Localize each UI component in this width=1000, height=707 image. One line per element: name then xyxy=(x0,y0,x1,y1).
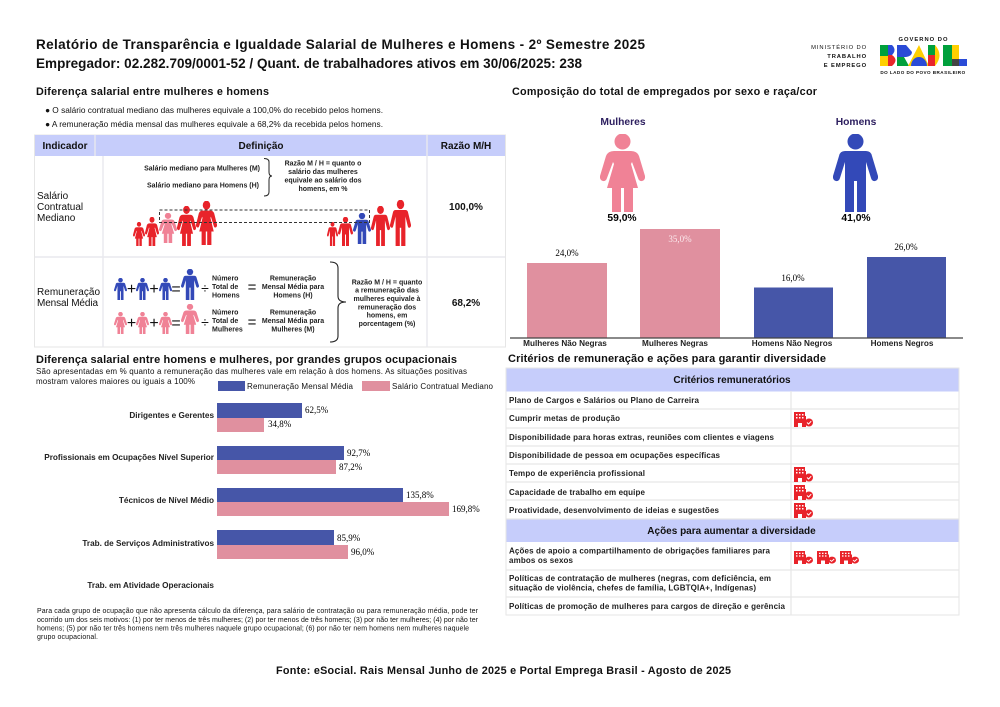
group: atividade operacional: Trab. em Atividade Operacionais xyxy=(87,581,214,590)
actions list xyxy=(509,546,786,611)
group: profissionais: Profissionais em Ocupações Nível Superior xyxy=(44,453,215,462)
panel: mulheres pictogram: 59,0% xyxy=(607,213,637,224)
razão m/h explanation: homens, em % xyxy=(298,186,348,193)
chart description: São apresentadas em % quanto a remuneração das mulheres vale em relação à dos homens. As situações positivas xyxy=(36,367,467,376)
row label: salário contratual mediano: Salário xyxy=(37,191,69,202)
razão m/h explanation: salário das mulheres xyxy=(288,169,358,176)
fórmula mulheres: Mulheres xyxy=(212,326,243,334)
criteria list: Capacidade de trabalho em equipe xyxy=(509,488,646,497)
razão m/h explanation 2: Razão M / H = quanto xyxy=(352,280,422,286)
table header xyxy=(42,141,491,152)
fórmula homens: Remuneração xyxy=(270,276,316,282)
bar: mulheres não negras xyxy=(523,248,607,348)
definição salário mediano text: Salário mediano para Mulheres (M) xyxy=(144,166,260,172)
razão m/h explanation: Razão M / H = quanto o xyxy=(285,160,361,168)
group: técnicos: Técnicos de Nível Médio xyxy=(119,496,214,505)
bullet text block: ● O salário contratual mediano das mulheres equivale a 100,0% do recebido pelos homens. xyxy=(45,105,383,115)
legend xyxy=(218,381,494,391)
panel: mulheres pictogram: Mulheres xyxy=(600,117,646,128)
razão m/h explanation 2: remuneração dos xyxy=(358,304,416,311)
group: serviços administrativos: 96,0% xyxy=(351,547,375,557)
criteria list: Proatividade, desenvolvimento de ideias e sugestões xyxy=(509,506,720,515)
razão m/h explanation 2: mulheres equivale à xyxy=(354,296,421,303)
fórmula homens: + xyxy=(149,281,159,298)
fórmula homens: ÷ xyxy=(201,280,209,296)
fórmula mulheres: ÷ xyxy=(201,314,209,330)
icon group: homens ordenados xyxy=(327,200,411,246)
group: serviços administrativos: Trab. de Serviços Administrativos xyxy=(82,539,214,548)
definição salário mediano text: Salário mediano para Homens (H) xyxy=(147,182,259,190)
fórmula homens: Homens (H) xyxy=(273,292,313,300)
criteria list: Tempo de experiência profissional xyxy=(509,469,645,478)
icons: critérios adotados xyxy=(794,412,813,518)
logo: governo do brasil: DO LADO DO POVO BRASILEIRO xyxy=(880,70,966,75)
fórmula mulheres: Mulheres (M) xyxy=(271,326,315,334)
bar: mulheres negras xyxy=(640,229,720,348)
title xyxy=(36,37,645,71)
razão m/h explanation 2: homens, em xyxy=(367,313,407,320)
footnote: ocorrido um dos seis motivos: (1) por ter menos de três mulheres; (2) por ter menos de três homens; (3) por não ter mulheres; (4) por não ter xyxy=(37,617,479,624)
footnote xyxy=(37,608,479,641)
criteria list: Disponibilidade para horas extras, reuniões com clientes e viagens xyxy=(509,433,775,442)
razão m/h explanation: equivale ao salário dos xyxy=(284,178,362,184)
table header: Razão M/H xyxy=(441,141,491,152)
chart description xyxy=(36,367,467,386)
heading: diferença por grupos ocupacionais: Diferença salarial entre homens e mulheres, por grandes grupos ocupacionais xyxy=(36,354,457,366)
panel: homens pictogram xyxy=(833,117,878,224)
row label: remuneração mensal média: Mensal Média xyxy=(37,298,98,309)
fórmula homens: Total de xyxy=(212,284,238,291)
panel: homens pictogram: Homens xyxy=(836,117,877,128)
fórmula mulheres: + xyxy=(149,315,159,332)
heading: critérios de remuneração: Critérios de remuneração e ações para garantir diversidade xyxy=(508,353,826,365)
value: 100,0%: 100,0% xyxy=(449,202,483,213)
table header: Definição xyxy=(238,141,284,152)
actions list: ambos os sexos xyxy=(509,556,574,565)
heading: composição: Composição do total de empregados por sexo e raça/cor xyxy=(512,86,818,98)
razão m/h explanation 2 xyxy=(352,280,422,328)
fórmula homens: = xyxy=(248,279,257,296)
fórmula mulheres: Número xyxy=(212,310,238,316)
group: técnicos: 169,8% xyxy=(452,504,480,514)
fórmula mulheres: Total de xyxy=(212,318,238,325)
razão m/h explanation 2: porcentagem (%) xyxy=(359,321,415,328)
fórmula mulheres: + xyxy=(127,315,136,332)
fórmula mulheres: = xyxy=(248,314,257,331)
group: serviços administrativos xyxy=(82,530,375,559)
header: ações para aumentar a diversidade: Ações para aumentar a diversidade xyxy=(647,526,816,537)
fórmula homens: Mensal Média para xyxy=(262,284,324,291)
fórmula homens: + xyxy=(127,281,136,298)
heading: diferença salarial entre mulheres e homens: Diferença salarial entre mulheres e homens xyxy=(36,86,269,98)
row label: remuneração mensal média xyxy=(37,287,100,309)
source: Fonte: eSocial. Rais Mensal Junho de 2025 e Portal Emprega Brasil - Agosto de 2025 xyxy=(276,665,731,677)
razão m/h explanation xyxy=(284,160,362,193)
footnote: homens; (5) por não ter três homens nem três mulheres naquele grupo ocupacional; (6) por não ter nem homens nem mulheres naquele xyxy=(37,626,469,632)
fórmula homens: Homens xyxy=(212,292,240,300)
fórmula mulheres xyxy=(114,304,324,334)
criteria list: Plano de Cargos e Salários ou Plano de Carreira xyxy=(509,396,700,405)
logo: ministério do trabalho e emprego: E EMPREGO xyxy=(824,63,867,69)
group: técnicos xyxy=(119,488,480,516)
logo: governo do brasil xyxy=(880,37,967,75)
title: Empregador: 02.282.709/0001-52 / Quant. de trabalhadores ativos em 30/06/2025: 238 xyxy=(36,56,582,71)
chart description: mostram valores maiores ou iguais a 100% xyxy=(36,377,195,386)
bar: homens não negros: 16,0% xyxy=(781,273,805,283)
razão m/h explanation 2: a remuneração das xyxy=(355,288,419,295)
legend: Remuneração Mensal Média xyxy=(247,382,354,391)
criteria list xyxy=(509,396,775,515)
actions list: Políticas de promoção de mulheres para cargos de direção e gerência xyxy=(509,602,786,611)
group: dirigentes e gerentes xyxy=(129,403,329,432)
bar: homens negros xyxy=(867,242,946,348)
bar chart: composição por sexo e raça xyxy=(510,229,963,348)
definição salário mediano text xyxy=(144,166,260,190)
fórmula mulheres: = xyxy=(171,315,181,332)
bar: homens não negros xyxy=(752,273,833,348)
panel: homens pictogram: 41,0% xyxy=(841,213,871,224)
group: profissionais xyxy=(44,446,371,474)
fórmula mulheres: Mensal Média para xyxy=(262,318,324,325)
large brace xyxy=(330,262,346,342)
group: profissionais: 92,7% xyxy=(347,448,371,458)
criteria list: Disponibilidade de pessoa em ocupações específicas xyxy=(509,451,721,460)
footnote: Para cada grupo de ocupação que não apresenta cálculo da diferença, para salário de contratação ou para remuneração média, pode ter xyxy=(37,608,479,615)
footnote: grupo ocupacional. xyxy=(37,634,98,641)
title: Relatório de Transparência e Igualdade Salarial de Mulheres e Homens - 2º Semestre 2025 xyxy=(36,37,645,52)
bar: homens não negros: Homens Não Negros xyxy=(752,339,833,348)
bar: homens negros: Homens Negros xyxy=(871,339,934,348)
fórmula mulheres: Remuneração xyxy=(270,310,316,316)
dashed median box xyxy=(160,210,370,222)
group: serviços administrativos: 85,9% xyxy=(337,533,361,543)
row label: salário contratual mediano xyxy=(37,191,83,224)
bar: mulheres negras: 35,0% xyxy=(668,234,692,244)
icons: ações adotadas xyxy=(794,551,859,564)
legend: Salário Contratual Mediano xyxy=(392,382,494,391)
row label: salário contratual mediano: Contratual xyxy=(37,202,83,213)
actions list: Políticas de contratação de mulheres (negras, com deficiência, em xyxy=(509,574,771,583)
bar: mulheres negras: Mulheres Negras xyxy=(642,339,708,348)
bar: homens negros: 26,0% xyxy=(894,242,918,252)
bullet text block: ● A remuneração média mensal das mulheres equivale a 68,2% da recebida pelos homens. xyxy=(45,119,383,129)
group: profissionais: 87,2% xyxy=(339,462,363,472)
actions list: situação de violência, chefes de família, LGBTQIA+, Indígenas) xyxy=(509,584,756,592)
actions list: Ações de apoio a compartilhamento de obrigações familiares para xyxy=(509,546,771,556)
fórmula homens xyxy=(114,269,324,300)
bullet text block xyxy=(45,105,383,129)
fórmula homens: = xyxy=(171,281,181,298)
panel: critérios e ações table xyxy=(506,368,959,615)
bar: mulheres não negras: Mulheres Não Negras xyxy=(523,339,607,348)
table header: Indicador xyxy=(42,141,88,152)
group: dirigentes e gerentes: 62,5% xyxy=(305,405,329,415)
panel: tabela de indicadores xyxy=(34,135,506,347)
logo: ministério do trabalho e emprego: TRABALHO xyxy=(827,54,867,60)
group: técnicos: 135,8% xyxy=(406,490,434,500)
value: 68,2%: 68,2% xyxy=(452,298,480,309)
group: dirigentes e gerentes: 34,8% xyxy=(268,419,292,429)
icon group: mulheres ordenadas xyxy=(133,201,217,246)
row label: salário contratual mediano: Mediano xyxy=(37,213,76,224)
fórmula homens: Número xyxy=(212,276,238,282)
logo: ministério do trabalho e emprego: MINISTÉRIO DO xyxy=(811,44,867,51)
bar chart: grupos ocupacionais xyxy=(44,403,480,590)
header: critérios remuneratórios: Critérios remuneratórios xyxy=(673,375,791,386)
criteria list: Cumprir metas de produção xyxy=(509,414,620,423)
group: dirigentes e gerentes: Dirigentes e Gerentes xyxy=(129,411,214,420)
bar: mulheres não negras: 24,0% xyxy=(555,248,579,258)
brace xyxy=(264,158,272,196)
logo: governo do brasil: GOVERNO DO xyxy=(899,37,948,43)
logo: ministério do trabalho e emprego xyxy=(811,44,867,69)
row label: remuneração mensal média: Remuneração xyxy=(37,287,100,298)
panel: mulheres pictogram xyxy=(600,117,646,224)
